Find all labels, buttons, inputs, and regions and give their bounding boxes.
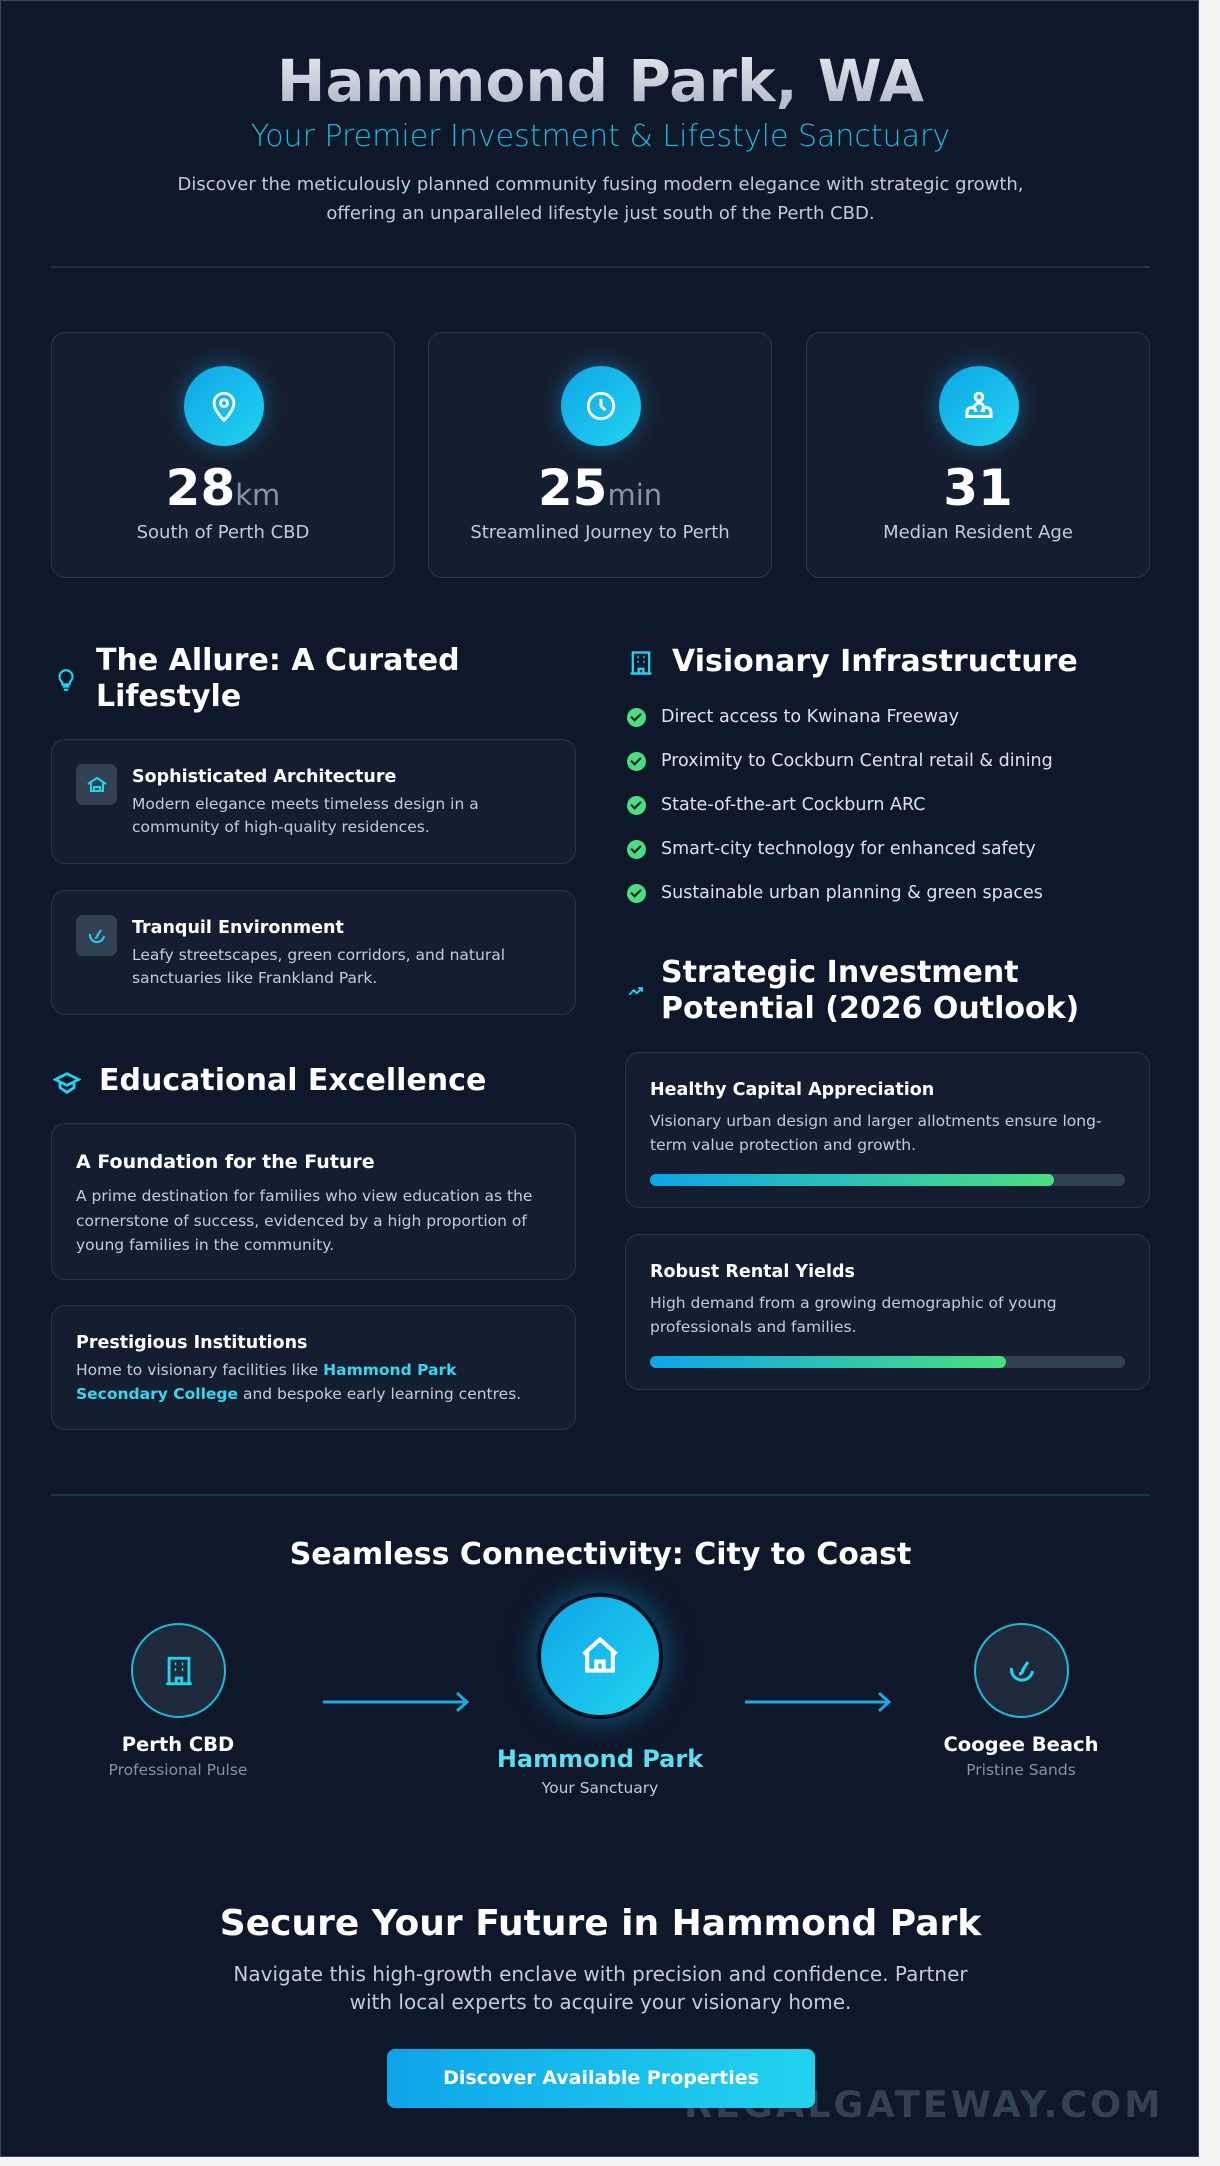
infrastructure list [627, 707, 1053, 903]
progress bar 85% [650, 1174, 1125, 1186]
heading: allure [58, 643, 460, 714]
card: architecture [51, 739, 576, 864]
title: Hammond Park, WA [277, 47, 924, 115]
CTA button: Discover Available Properties [443, 2067, 759, 2089]
text: Proximity to Cockburn Central retail & dining [661, 751, 1053, 771]
stat card: travel time: 25min [538, 459, 662, 517]
intro text: offering an unparalleled lifestyle just south of the Perth CBD. [326, 203, 875, 224]
text: Sustainable urban planning & green spaces [661, 883, 1043, 903]
icon: map pin [184, 366, 264, 446]
node: Hammond Park: Hammond Park [497, 1745, 703, 1773]
card: architecture: Modern elegance meets timeless design in a [132, 795, 479, 813]
stat card: distance [51, 332, 395, 578]
stat card: age [806, 332, 1150, 578]
icon: trend up [628, 987, 643, 996]
node: Perth CBD [109, 1623, 247, 1779]
text: Direct access to Kwinana Freeway [661, 707, 959, 727]
card: institutions: Secondary College and bespoke early learning centres. [76, 1385, 521, 1403]
watermark: REGALGATEWAY.COM [684, 2083, 1163, 2126]
intro text [177, 174, 1024, 224]
CTA text: Navigate this high-growth enclave with precision and confidence. Partner [233, 1962, 968, 1986]
icon: people [939, 366, 1019, 446]
text: Smart-city technology for enhanced safety [661, 839, 1036, 859]
heading: investment: Potential (2026 Outlook) [661, 991, 1079, 1026]
icon: leaf [76, 915, 117, 956]
icon: graduation cap [53, 1072, 81, 1094]
card: foundation: A prime destination for families who view education as the [76, 1187, 532, 1205]
icon: building [630, 651, 652, 675]
intro text: Discover the meticulously planned community fusing modern elegance with strategic growth, [177, 174, 1024, 195]
stat card: travel time: Streamlined Journey to Perth [470, 522, 730, 543]
card: capital appreciation: Visionary urban design and larger allotments ensure long- [650, 1112, 1102, 1130]
subtitle: Your Premier Investment & Lifestyle Sanctuary [251, 119, 950, 154]
card: institutions: Prestigious Institutions [76, 1333, 307, 1353]
arrow 1 [323, 1692, 470, 1712]
card: architecture: community of high-quality residences. [132, 818, 430, 836]
icon: clock [561, 366, 641, 446]
heading: allure: The Allure: A Curated [96, 643, 460, 678]
node: Coogee Beach: Pristine Sands [966, 1761, 1076, 1779]
stat card: age: 31 [943, 459, 1013, 517]
stat card: travel time [428, 332, 772, 578]
card: foundation: A Foundation for the Future [76, 1151, 375, 1173]
heading: education: Educational Excellence [99, 1063, 486, 1098]
title [1, 46, 1200, 116]
node: Hammond Park: Your Sanctuary [542, 1779, 658, 1797]
heading: connectivity: Seamless Connectivity: City to Coast [290, 1537, 911, 1572]
node: Hammond Park [497, 1576, 704, 1797]
card: institutions: Home to visionary facilities like Hammond Park [76, 1361, 456, 1379]
card: rental yields [625, 1234, 1150, 1390]
card: capital appreciation [625, 1052, 1150, 1208]
CTA heading: Secure Your Future in Hammond Park [220, 1903, 981, 1944]
card: rental yields: High demand from a growing demographic of young [650, 1294, 1057, 1312]
card: capital appreciation: term value protection and growth. [650, 1136, 916, 1154]
card: rental yields: professionals and families. [650, 1318, 857, 1336]
card: environment: Tranquil Environment [132, 918, 344, 938]
heading: investment [628, 955, 1079, 1026]
node: Coogee Beach [944, 1623, 1098, 1779]
arrow 2 [745, 1692, 892, 1712]
heading: investment: Strategic Investment [661, 955, 1019, 990]
card: institutions [51, 1305, 576, 1430]
card: foundation: young families in the community. [76, 1236, 334, 1254]
card: environment [51, 890, 576, 1015]
icon: bulb [58, 669, 74, 691]
card: foundation: cornerstone of success, evidenced by a high proportion of [76, 1212, 527, 1230]
node: Perth CBD: Perth CBD [122, 1733, 234, 1756]
text: State-of-the-art Cockburn ARC [661, 795, 925, 815]
node: Perth CBD: Professional Pulse [109, 1761, 247, 1779]
stat card: age: Median Resident Age [883, 522, 1073, 543]
card: environment: Leafy streetscapes, green corridors, and natural [132, 946, 505, 964]
icon: house [76, 764, 117, 805]
CTA text: with local experts to acquire your visionary home. [350, 1990, 851, 2014]
CTA button [387, 2049, 815, 2108]
heading: infrastructure: Visionary Infrastructure [672, 644, 1078, 679]
CTA text [233, 1962, 968, 2014]
heading: allure: Lifestyle [96, 679, 241, 714]
card: environment: sanctuaries like Frankland Park. [132, 969, 377, 987]
stat card: distance: South of Perth CBD [137, 522, 309, 543]
node: Coogee Beach: Coogee Beach [944, 1733, 1098, 1756]
stat card: distance: 28km [166, 459, 280, 517]
card: capital appreciation: Healthy Capital Appreciation [650, 1080, 934, 1100]
card: rental yields: Robust Rental Yields [650, 1262, 855, 1282]
card: foundation [51, 1123, 576, 1280]
card: architecture: Sophisticated Architecture [132, 767, 396, 787]
progress bar 75% [650, 1356, 1125, 1368]
